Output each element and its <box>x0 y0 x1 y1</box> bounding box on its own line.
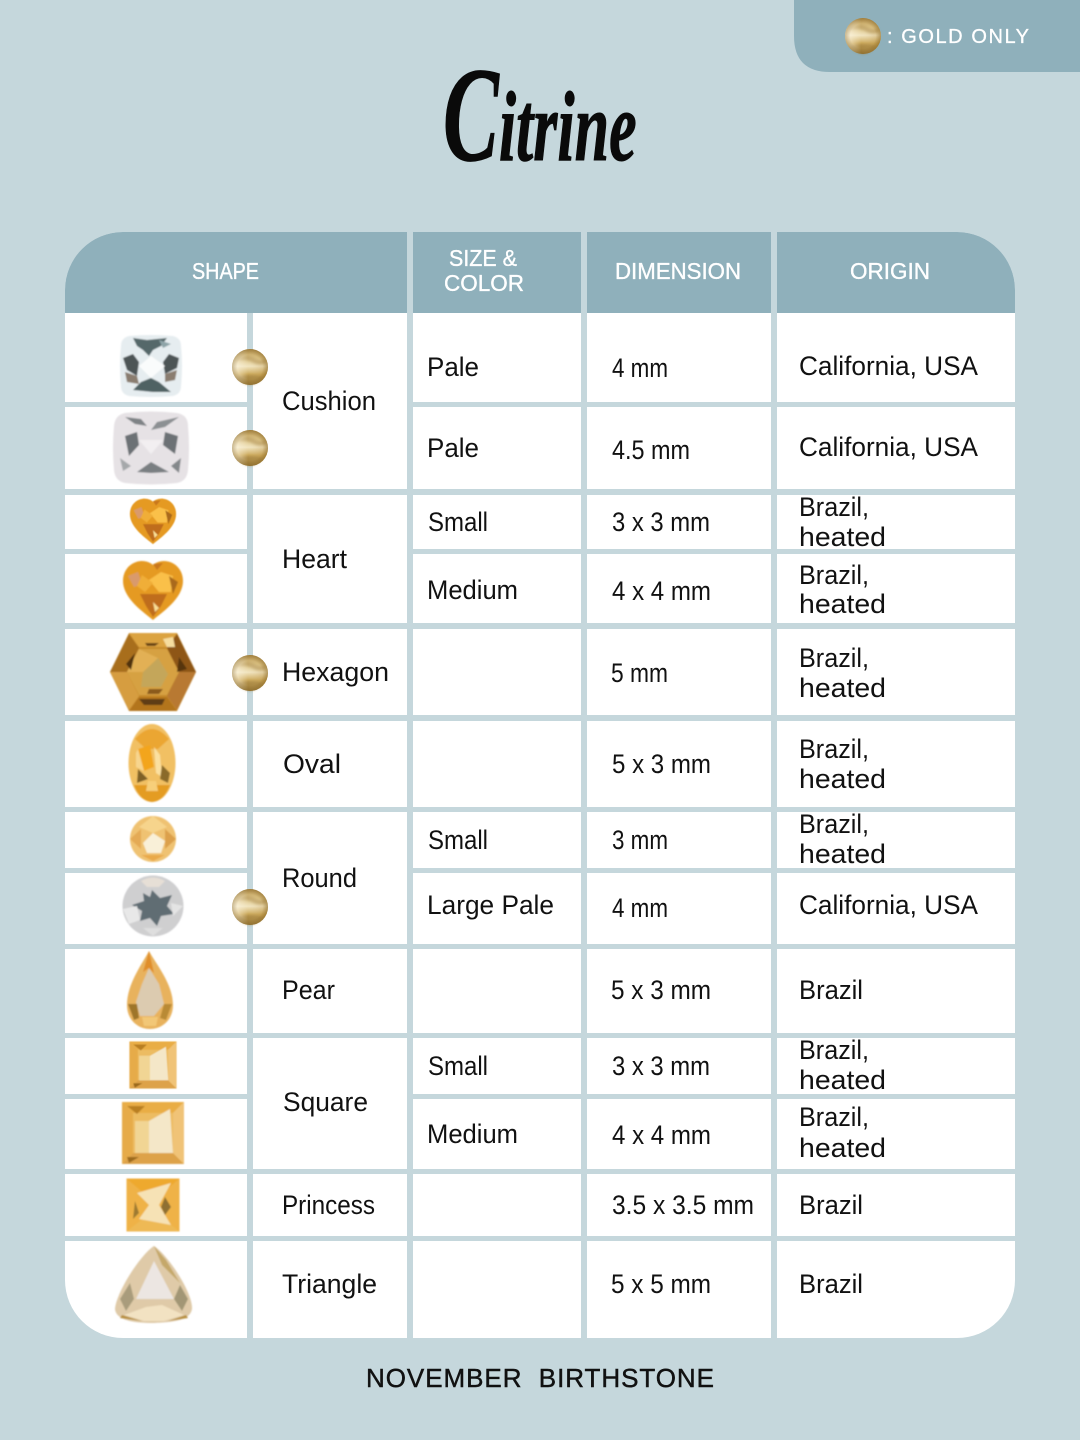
origin column: Brazil <box>799 975 863 1005</box>
origin column: Brazil <box>799 1269 863 1299</box>
shape names: Heart <box>282 544 347 574</box>
icon: gold swatch <box>845 18 881 54</box>
marker: cushion 4 mm <box>232 349 268 385</box>
gem: small square <box>129 1041 177 1089</box>
header: dimension: DIMENSION <box>615 258 741 284</box>
table body <box>65 232 1015 1338</box>
dimension column: 5 x 5 mm <box>611 1269 711 1299</box>
marker: hexagon <box>232 655 268 691</box>
size and color column: Small <box>428 1051 488 1081</box>
size and color column <box>427 352 554 1149</box>
header: size and color: SIZE & <box>449 245 517 271</box>
header: size and color: COLOR <box>444 270 524 296</box>
size and color column: Small <box>428 825 488 855</box>
shape names: Triangle <box>282 1269 377 1299</box>
gem: small round <box>130 816 176 862</box>
origin column: Brazil, <box>799 560 869 590</box>
gem images <box>110 335 196 1323</box>
column headers <box>192 245 930 296</box>
shape names <box>282 386 389 1299</box>
origin column: Brazil, <box>799 809 869 839</box>
dimension column: 3 x 3 mm <box>612 1051 710 1081</box>
header: shape: SHAPE <box>192 258 259 284</box>
dimension column: 5 mm <box>611 658 668 688</box>
table <box>65 232 1015 1338</box>
shape names: Hexagon <box>282 657 389 687</box>
origin column: California, USA <box>799 432 978 462</box>
origin column: Brazil, <box>799 734 869 764</box>
origin column: Brazil <box>799 1190 863 1220</box>
origin column: heated <box>799 764 886 794</box>
gem: oval <box>128 724 176 802</box>
dimension column: 4 x 4 mm <box>612 1120 711 1150</box>
origin column: Brazil, <box>799 1035 869 1065</box>
origin column: heated <box>799 839 886 869</box>
dimension column: 4 x 4 mm <box>612 576 711 606</box>
origin column <box>799 351 978 1299</box>
gem: triangle <box>115 1246 192 1323</box>
size and color column: Medium <box>427 575 518 605</box>
gem: small heart <box>130 499 176 544</box>
gem: cushion 4.5 mm <box>113 412 189 484</box>
dimension column: 5 x 3 mm <box>612 749 711 779</box>
dimension column: 3 mm <box>612 825 668 855</box>
title: Citrine <box>443 41 637 190</box>
size and color column: Medium <box>427 1119 518 1149</box>
gem: hexagon <box>110 633 196 711</box>
legend text: : GOLD ONLY <box>887 26 1029 48</box>
marker: large round <box>232 889 268 925</box>
origin column: California, USA <box>799 351 978 381</box>
shape names: Round <box>282 863 357 893</box>
origin column: Brazil, <box>799 492 869 522</box>
size and color column: Pale <box>427 433 479 463</box>
dimension column <box>611 353 754 1299</box>
dimension column: 3 x 3 mm <box>612 507 710 537</box>
footer caption: NOVEMBER BIRTHSTONE <box>366 1363 714 1393</box>
table header band <box>65 232 1015 313</box>
origin column: heated <box>799 522 886 552</box>
dimension column: 5 x 3 mm <box>611 975 711 1005</box>
shape names: Princess <box>282 1190 375 1220</box>
dimension column: 4.5 mm <box>612 435 690 465</box>
size and color column: Small <box>428 507 488 537</box>
origin column: California, USA <box>799 890 978 920</box>
origin column: heated <box>799 1133 886 1163</box>
shape names: Oval <box>283 749 341 779</box>
shape names: Square <box>283 1087 368 1117</box>
shape names: Pear <box>282 975 335 1005</box>
origin column: heated <box>799 1065 886 1095</box>
origin column: heated <box>799 589 886 619</box>
gem: cushion 4 mm <box>120 335 182 397</box>
legend tab: gold only <box>794 0 1080 72</box>
origin column: heated <box>799 673 886 703</box>
header: origin: ORIGIN <box>850 258 930 284</box>
gem: pear <box>127 951 173 1029</box>
gem: princess <box>126 1178 180 1232</box>
shape names: Cushion <box>282 386 376 416</box>
gem: large pale round <box>122 876 184 936</box>
gem: medium heart <box>123 561 183 620</box>
header: size and color <box>444 245 524 296</box>
origin column: Brazil, <box>799 643 869 673</box>
size and color column: Large Pale <box>427 890 554 920</box>
size and color column: Pale <box>427 352 479 382</box>
dimension column: 3.5 x 3.5 mm <box>612 1190 754 1220</box>
dimension column: 4 mm <box>612 353 668 383</box>
gold-only markers <box>232 349 268 925</box>
origin column: Brazil, <box>799 1102 869 1132</box>
gem: medium square <box>122 1102 184 1164</box>
dimension column: 4 mm <box>612 893 668 923</box>
marker: cushion 4.5 mm <box>232 430 268 466</box>
